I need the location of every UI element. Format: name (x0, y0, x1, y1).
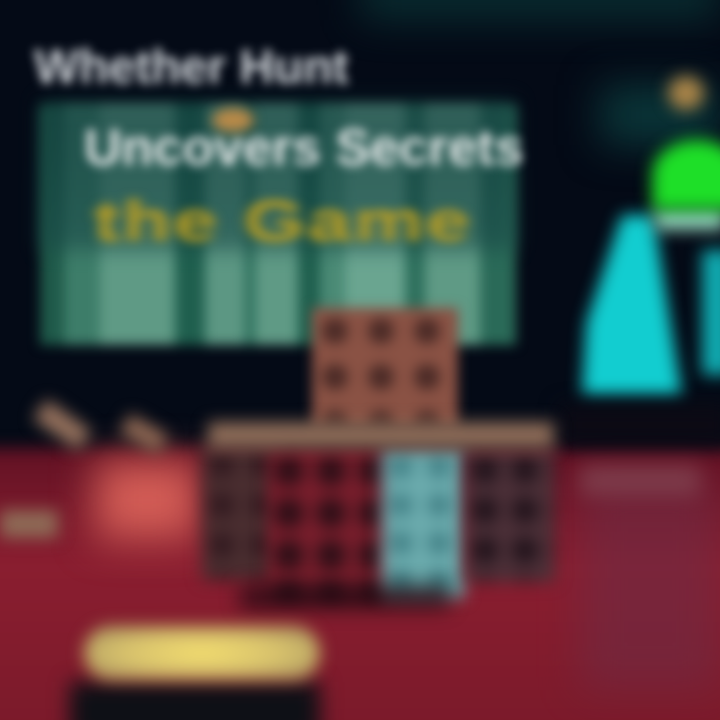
chip: lower left (0, 510, 58, 538)
die pattern (312, 308, 458, 428)
icon: dice shadow (240, 585, 450, 609)
panel: screen (40, 105, 516, 345)
panel: dark table edge (560, 405, 720, 445)
panel: red table (0, 448, 720, 720)
heading: top line: Whether Hunt (34, 41, 349, 94)
panel: table top right highlight (580, 465, 700, 495)
panel: scattered chips left (26, 392, 175, 458)
icon: green figure head (652, 140, 720, 210)
die pattern (268, 450, 383, 600)
icon: top die (312, 308, 458, 428)
icon: cyan figure right (702, 250, 720, 375)
panel: table left highlight (95, 460, 200, 540)
die pattern (465, 450, 555, 582)
icon: left die (202, 445, 277, 580)
die pattern (382, 448, 464, 598)
heading: second line: Uncovers Secrets (84, 119, 523, 177)
icon: orange dot on heading (212, 108, 254, 132)
icon: die row top face (208, 422, 554, 448)
panel: right teal glow (600, 85, 720, 145)
icon: dark right die (465, 450, 555, 582)
panel: pale collar (655, 208, 720, 230)
icon: red die (268, 450, 383, 600)
heading: yellow line: the Game (94, 189, 472, 254)
icon: cyan die (382, 448, 464, 598)
chip 2 (119, 413, 169, 455)
icon: amber light (668, 76, 704, 110)
icon: yellow glowing disc (84, 626, 320, 680)
figure body shape (582, 215, 687, 395)
icon: cyan figure body (570, 202, 692, 406)
panel: screen upper shade (40, 100, 516, 250)
panel: dark base lower left (70, 682, 320, 720)
die pattern (202, 445, 277, 580)
panel: table right shading (580, 480, 720, 690)
background glow (360, 0, 720, 20)
chip 1 (33, 399, 92, 451)
